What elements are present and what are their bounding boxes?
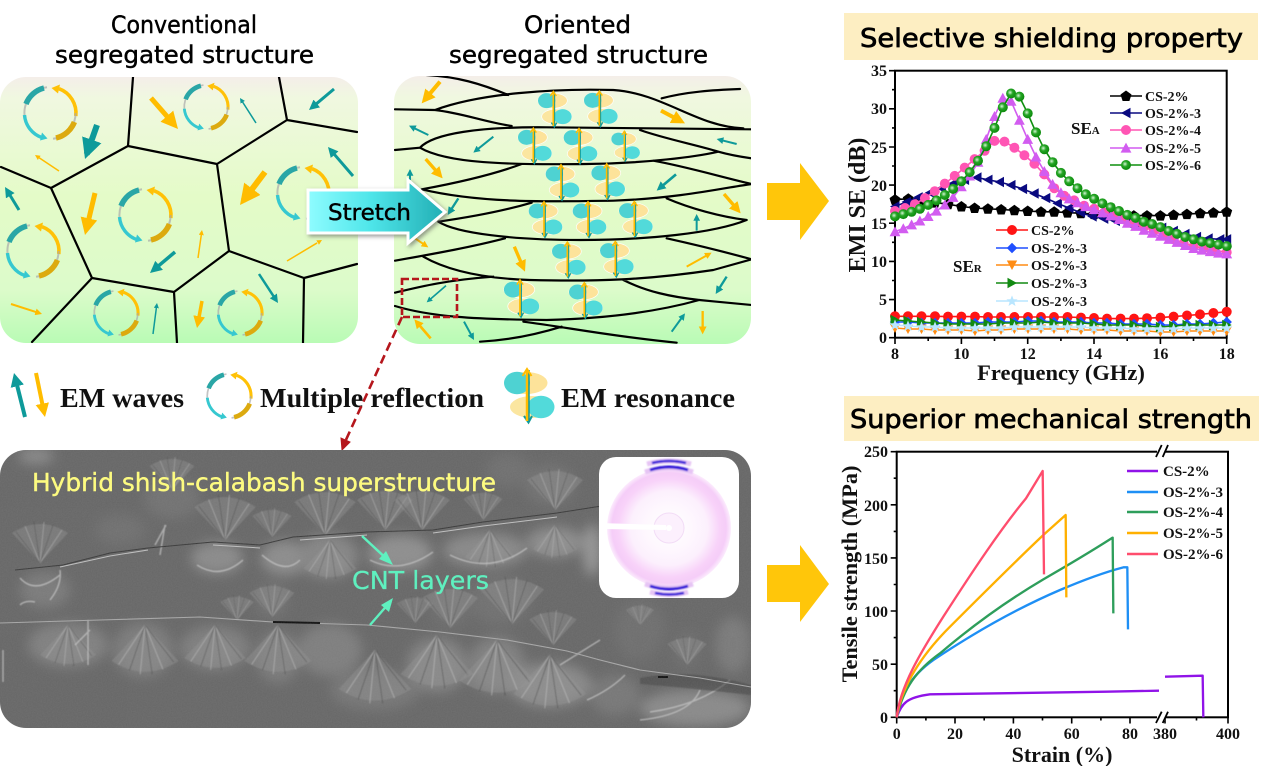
stress-strain curves: [897, 471, 1203, 717]
legend: strength series: OS-2%-5: [1163, 526, 1223, 542]
legend: EM waves: [14, 373, 184, 417]
series: SE-A OS-2%-3: [895, 178, 1227, 239]
legend: strength series: OS-2%-6: [1163, 547, 1224, 563]
y axis labels: 35: [871, 63, 887, 80]
arrow: red dashed zoom indicator: [341, 279, 457, 450]
annotation: SE-A: SEA: [1071, 119, 1100, 138]
legend: multiple reflection: Multiple reflection: [260, 383, 484, 413]
icons: multiple reflection loops: [7, 83, 329, 336]
legend: SE-A series: OS-2%-6: [1145, 159, 1201, 174]
panel: conventional segregated grain diagram: [0, 77, 358, 343]
y axis labels: 0: [879, 330, 887, 347]
title: oriented segregated structure: Oriented: [524, 11, 631, 39]
panel: SEM micrograph: [0, 448, 751, 728]
x axis labels: 0: [893, 726, 901, 743]
y axis labels: 0: [880, 710, 888, 727]
legend: EM waves: EM waves: [60, 383, 184, 413]
x axis labels: 14: [1086, 346, 1102, 363]
y axis labels: 20: [871, 178, 887, 195]
series: SE-R OS-2%-3 green: [895, 320, 1227, 327]
y axis labels: [871, 63, 887, 347]
x axis labels: 400: [1216, 726, 1240, 743]
CNT layer lines: [0, 505, 751, 687]
title: oriented segregated structure: [449, 11, 708, 69]
legend: SE-R series: [996, 224, 1087, 310]
bright lamella edges and streaks: [3, 525, 730, 720]
axes and ticks: [891, 452, 1228, 724]
series: SE-R OS-2%-3 blue: [895, 321, 1227, 325]
heading: selective shielding property: Selective shielding property: [860, 24, 1243, 54]
arrows: EM waves in stretched grains: [409, 82, 741, 340]
y axis labels: 30: [871, 101, 887, 118]
legend: SE-A series: OS-2%-4: [1145, 124, 1201, 139]
legend: SE-R series: CS-2%: [1031, 224, 1075, 239]
legend: strength series: [1127, 464, 1224, 563]
panel: oriented segregated grain diagram: [394, 75, 752, 344]
legend: EM resonance: [504, 369, 735, 422]
y axis labels: 25: [871, 140, 887, 157]
arrow: yellow block to shielding chart: [767, 163, 829, 240]
series: SE-A OS-2%-5: [895, 98, 1227, 254]
legend: multiple reflection: [207, 372, 484, 419]
y axis labels: 15: [871, 216, 887, 233]
axis title: x: Frequency (GHz): [977, 360, 1145, 385]
x axis labels: 60: [1064, 726, 1080, 743]
stretched grain boundaries: [395, 75, 752, 343]
y axis labels: 150: [864, 551, 888, 568]
x axis labels: 380: [1153, 726, 1177, 743]
title: oriented segregated structure: segregated structure: [449, 41, 708, 69]
x axis labels: 40: [1005, 726, 1021, 743]
x axis labels: [891, 346, 1235, 363]
label: CNT layers with arrows: [352, 536, 489, 625]
legend: SE-R series: OS-2%-3: [1031, 277, 1087, 292]
arrow: stretch: [308, 180, 445, 243]
chart: tensile strength vs strain: [837, 444, 1240, 766]
series: SE-A OS-2%-6: [895, 94, 1227, 246]
y axis labels: 5: [879, 292, 887, 309]
legend: SE-R series: OS-2%-3: [1031, 295, 1087, 310]
heading: superior mechanical strength: [844, 396, 1259, 441]
label: hybrid shish-calabash superstructure: Hybrid shish-calabash superstructure: [32, 468, 496, 497]
annotation: SE-R: SER: [953, 257, 983, 276]
x axis labels: 8: [891, 346, 899, 363]
heading: selective shielding property: [844, 13, 1258, 60]
y axis labels: 200: [864, 498, 888, 515]
axis break marks: [1156, 445, 1168, 723]
title: conventional segregated structure: Conventional: [111, 11, 257, 39]
icons: EM resonance ellipses: [504, 91, 653, 318]
series: SE-R OS-2%-3 light blue: [895, 325, 1227, 329]
series: SE-A CS-2%: [895, 199, 1227, 216]
legend: strength series: CS-2%: [1163, 464, 1210, 480]
grain boundaries: [1, 77, 357, 343]
arrow: yellow block to strength chart: [767, 545, 829, 622]
legend: strength series: OS-2%-4: [1163, 505, 1224, 521]
y axis labels: 100: [864, 604, 888, 621]
axes and ticks: [889, 71, 1227, 344]
legend: EM resonance: EM resonance: [561, 383, 735, 413]
x axis labels: 10: [953, 346, 969, 363]
x axis labels: 18: [1219, 346, 1235, 363]
y axis labels: 250: [864, 444, 888, 461]
x axis labels: 20: [947, 726, 963, 743]
micrograph texture: calabash lamellae: [0, 448, 751, 726]
title: conventional segregated structure: [55, 11, 314, 69]
series: SE-A OS-2%-4: [895, 141, 1227, 252]
heading: superior mechanical strength: Superior mechanical strength: [850, 405, 1252, 435]
label: CNT layers with arrows: CNT layers: [352, 566, 489, 595]
x axis labels: 16: [1152, 346, 1168, 363]
chart: EMI shielding vs frequency: [845, 63, 1235, 385]
legend: strength series: OS-2%-3: [1163, 485, 1223, 501]
title: conventional segregated structure: segregated structure: [55, 41, 314, 69]
axis title: y: EMI SE (dB): [845, 138, 871, 272]
axis title: y: Tensile strength (MPa): [837, 466, 862, 682]
series: SE-R CS-2%: [895, 312, 1227, 319]
legend: SE-R series: OS-2%-3: [1031, 242, 1087, 257]
series: SE-R OS-2%-3 orange: [895, 328, 1227, 332]
arrow: stretch: Stretch: [328, 201, 411, 226]
legend: SE-A series: [1110, 90, 1201, 174]
arrows: EM waves in grains: [5, 89, 353, 334]
y axis labels: [864, 444, 888, 727]
legend: SE-A series: CS-2%: [1145, 90, 1189, 105]
x axis labels: [893, 726, 1240, 743]
inset: 2D X-ray scattering pattern: [599, 457, 739, 598]
legend: SE-R series: OS-2%-3: [1031, 259, 1087, 274]
x axis labels: 12: [1020, 346, 1036, 363]
y axis labels: 50: [872, 657, 888, 674]
x axis labels: 80: [1122, 726, 1138, 743]
legend: SE-A series: OS-2%-3: [1145, 107, 1201, 122]
legend: SE-A series: OS-2%-5: [1145, 142, 1201, 157]
y axis labels: 10: [871, 254, 887, 271]
